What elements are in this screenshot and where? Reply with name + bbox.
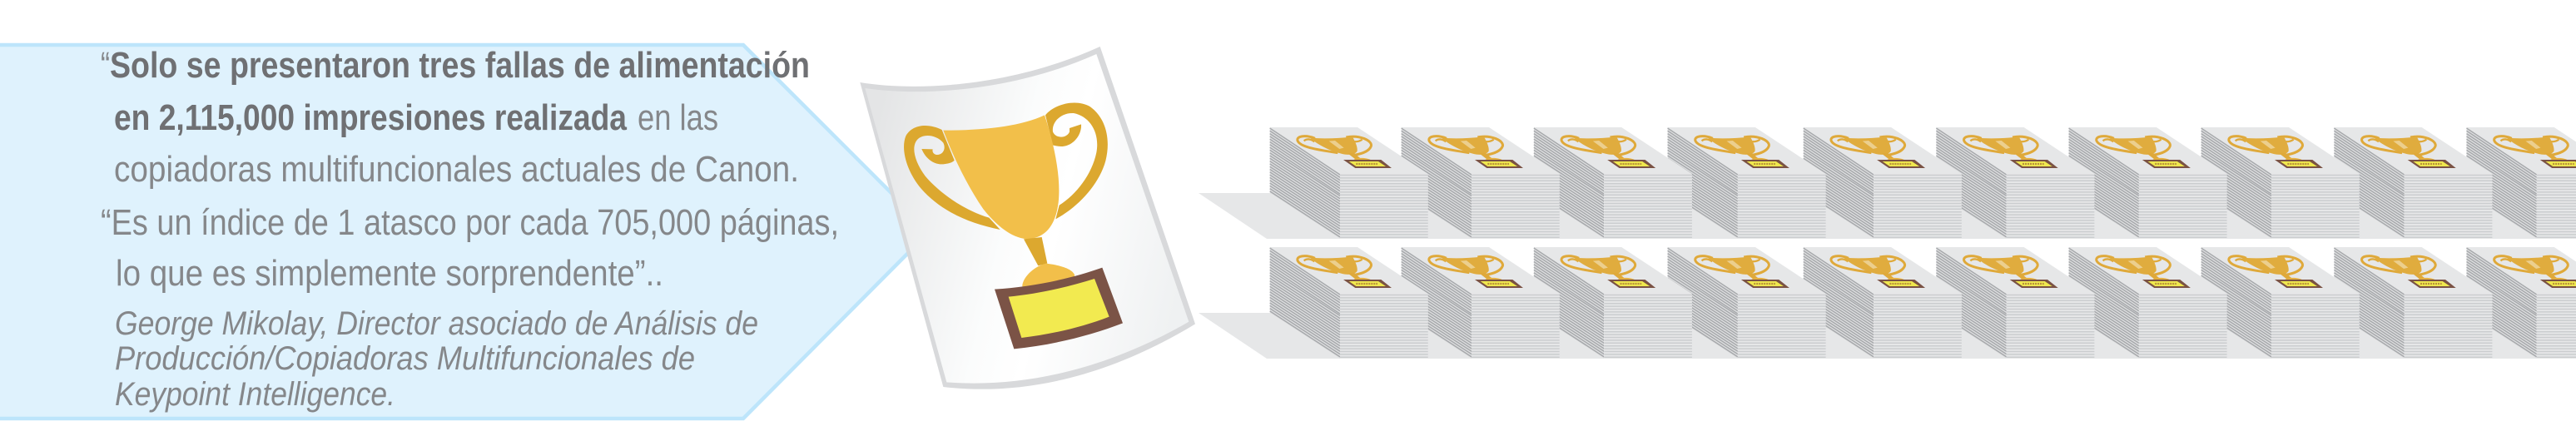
- line 5: lo que es simplemente sorprendente”..: [116, 253, 663, 294]
- attribution line 2: Producción/Copiadoras Multifuncionales de: [115, 340, 695, 377]
- panel: quote arrow: [0, 45, 930, 419]
- stack 3: [1462, 247, 1692, 359]
- stack 7: [1998, 247, 2227, 359]
- stack 5: [1732, 127, 1962, 239]
- stack 10: [2395, 247, 2576, 359]
- stack 2: [1330, 127, 1560, 239]
- stack 1: [1199, 247, 1428, 359]
- sheet face: [865, 54, 1189, 384]
- stack 9: [2263, 247, 2492, 359]
- quote text block: [101, 45, 839, 294]
- attribution line 1: George Mikolay, Director asociado de Análisis de: [115, 305, 758, 342]
- line 4: “Es un índice de 1 atasco por cada 705,000 páginas,: [101, 202, 839, 243]
- stack 6: [1865, 247, 2094, 359]
- trophy cup: [943, 115, 1059, 239]
- line 2 end: en las: [638, 97, 718, 138]
- row 1: paper stacks: [1199, 127, 2576, 239]
- trophy stem: [1024, 237, 1047, 265]
- stack 10: [2395, 127, 2576, 239]
- plaque label: [1009, 279, 1109, 338]
- bold line 2: en 2,115,000 impresiones realizada: [114, 97, 627, 138]
- row 2: paper stacks: [1199, 247, 2576, 359]
- stack 2: [1330, 247, 1560, 359]
- attribution: [115, 305, 758, 413]
- bold line 1: Solo se presentaron tres fallas de alimentación: [110, 45, 810, 86]
- stack 4: [1596, 247, 1826, 359]
- line 3: copiadoras multifuncionales actuales de Canon.: [114, 149, 799, 190]
- stack 4: [1596, 127, 1826, 239]
- stack 8: [2130, 247, 2360, 359]
- trophy left handle: [904, 126, 1000, 230]
- stack 6: [1865, 127, 2094, 239]
- stack 1: [1199, 127, 1428, 239]
- stack 5: [1732, 247, 1962, 359]
- stack 9: [2263, 127, 2492, 239]
- trophy plaque: [995, 268, 1123, 349]
- stack 7: [1998, 127, 2227, 239]
- icon: curved sheet with trophy: [860, 47, 1195, 389]
- stack 8: [2130, 127, 2360, 239]
- stack 3: [1462, 127, 1692, 239]
- trophy right handle: [1045, 103, 1108, 219]
- sheet border: [860, 47, 1195, 389]
- attribution line 3: Keypoint Intelligence.: [115, 376, 395, 413]
- opening quote mark: “: [101, 45, 110, 86]
- trophy base: [1022, 264, 1075, 287]
